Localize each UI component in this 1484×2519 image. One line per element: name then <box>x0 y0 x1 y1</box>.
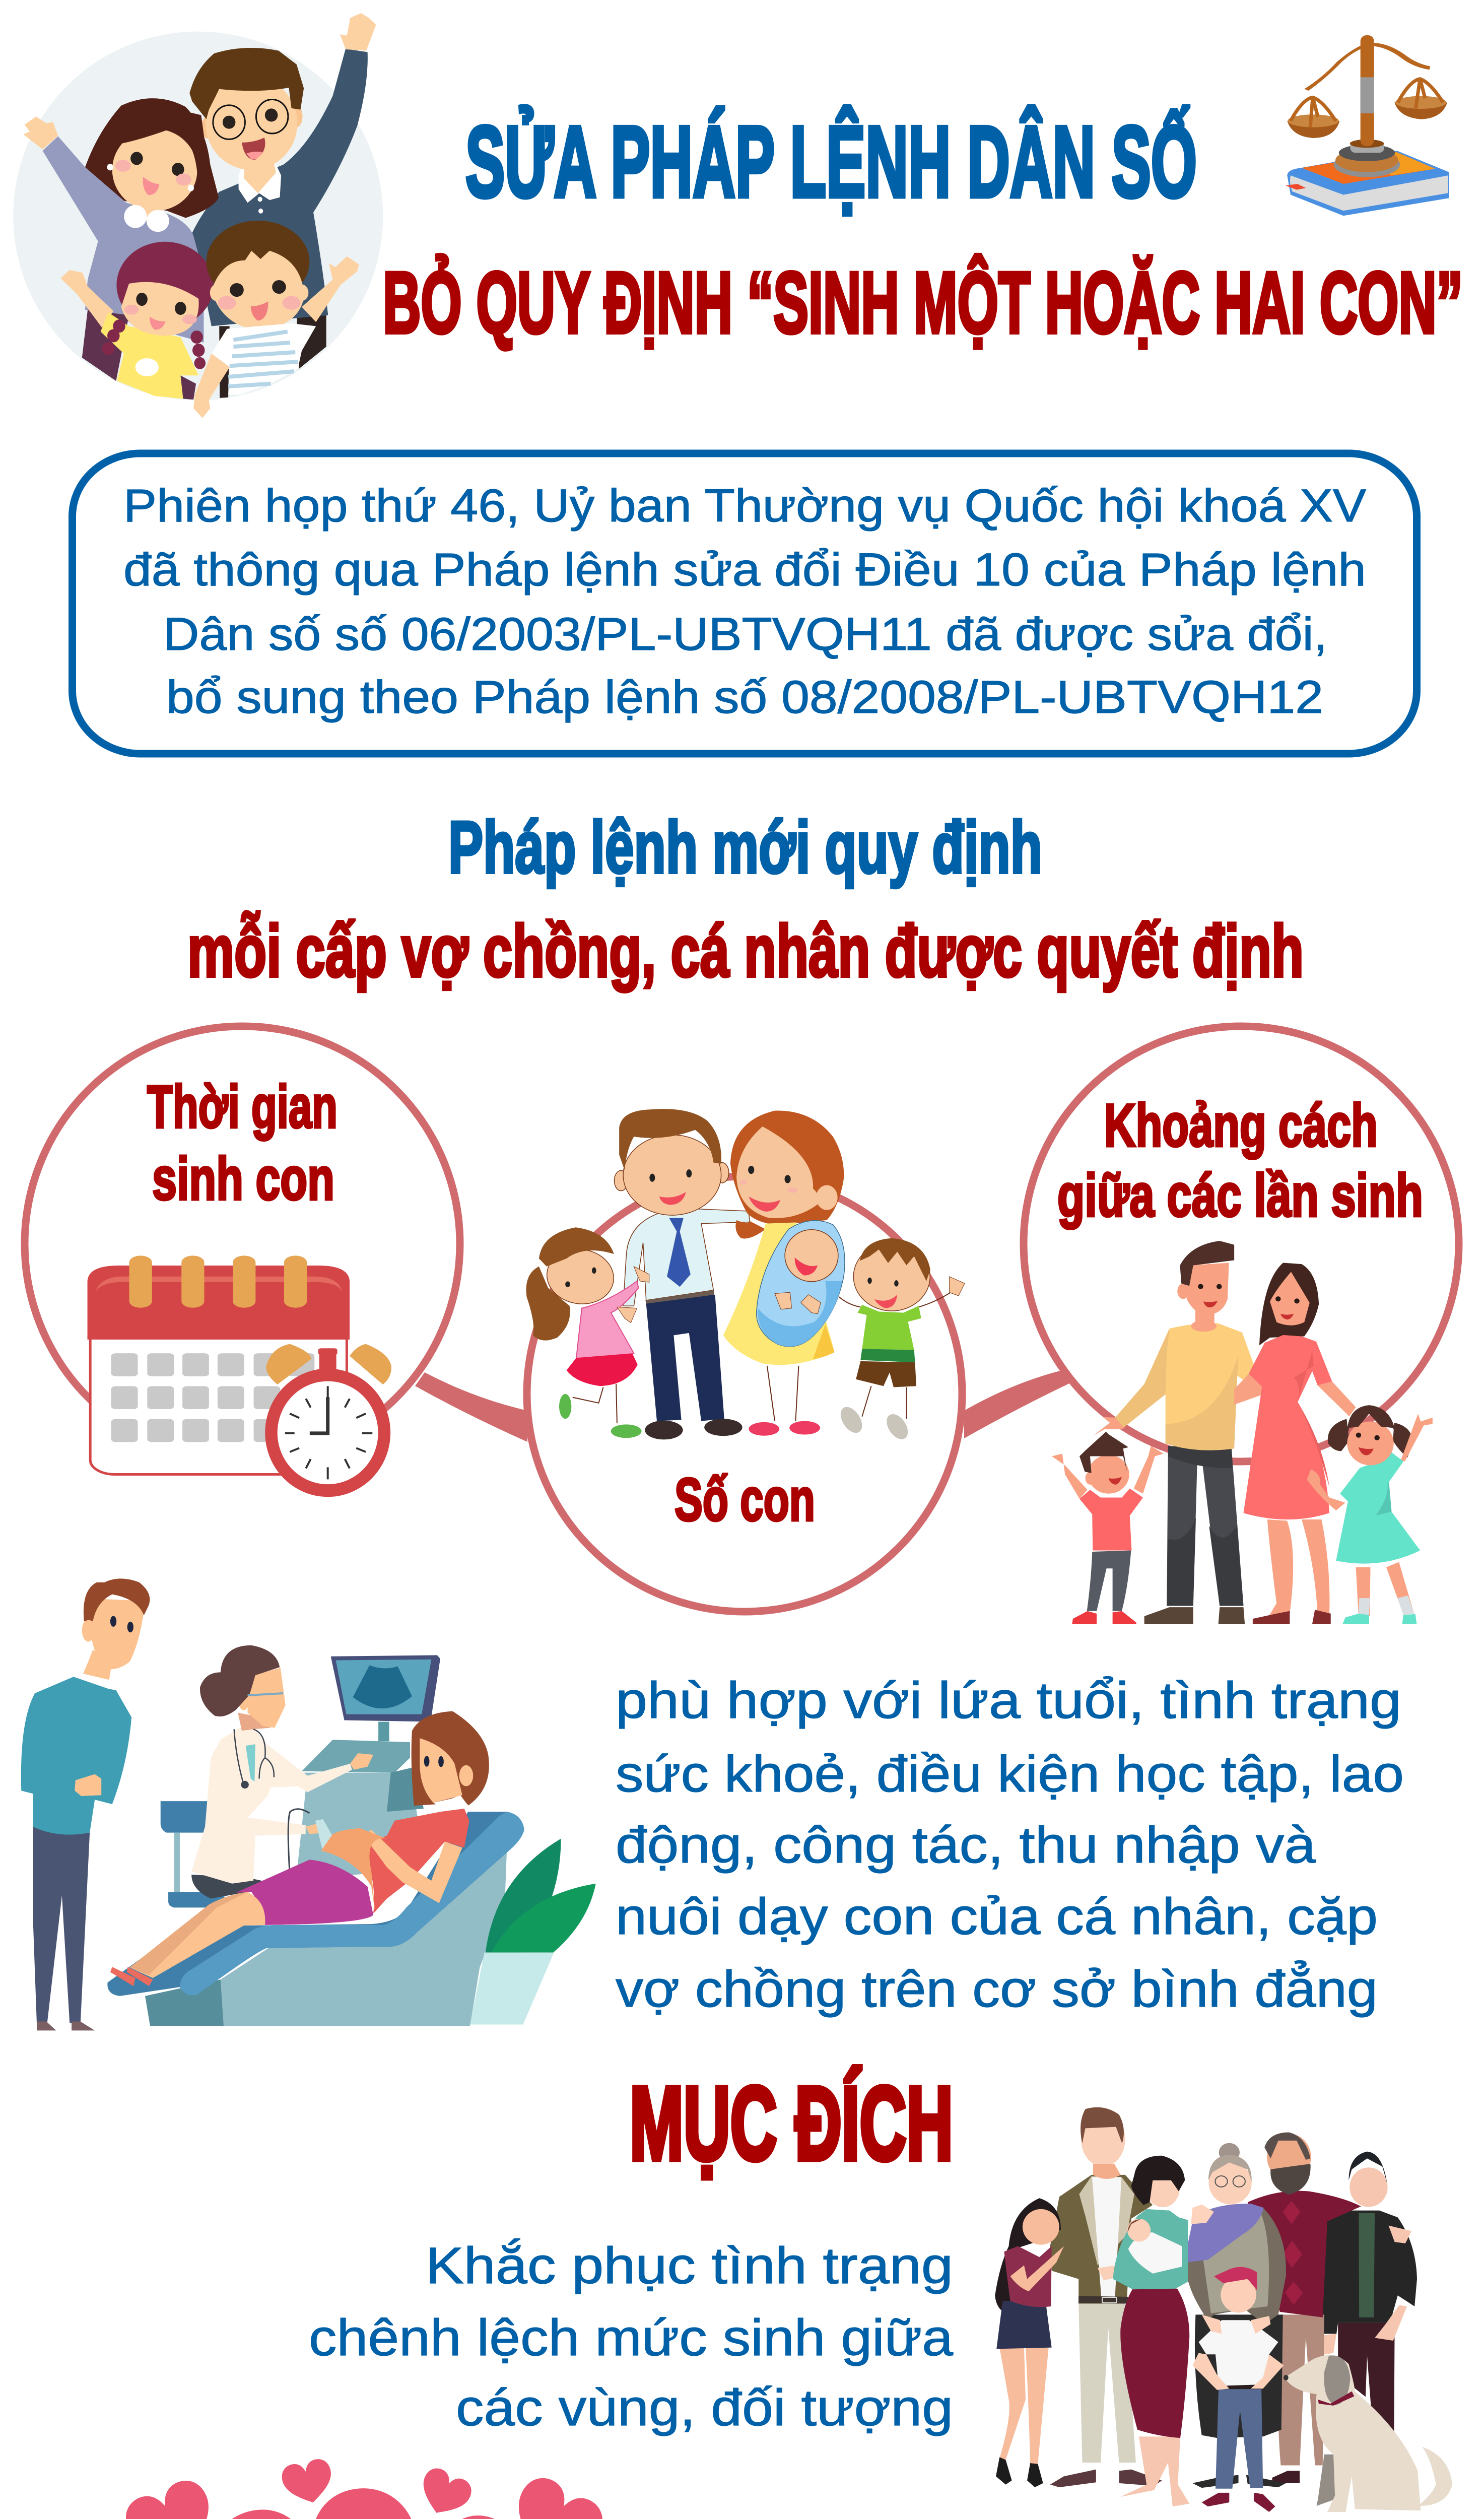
body text: purpose one <box>309 2237 953 2436</box>
illustration: family with newborn <box>526 1109 965 1441</box>
illustration: ultrasound scene <box>21 1578 596 2030</box>
girl left <box>995 2198 1064 2487</box>
body text: suitability: động, công tác, thu nhập và <box>616 1816 1316 1874</box>
title <box>383 106 1463 351</box>
illustration: heart tree with family <box>6 2457 681 2519</box>
heading: new ordinance <box>187 806 1304 992</box>
body text: purpose one: chênh lệch mức sinh giữa <box>309 2309 953 2366</box>
label: thoi gian sinh con <box>147 1073 338 1213</box>
label: so con: Số con <box>674 1466 815 1534</box>
boy <box>1052 1432 1164 1624</box>
heading: purpose: MỤC ĐÍCH <box>630 2065 953 2181</box>
label: khoang cach: Khoảng cách <box>1104 1092 1378 1159</box>
illustration: parents with two children <box>1052 1241 1433 1624</box>
mother <box>723 1111 844 1436</box>
baby <box>757 1221 845 1347</box>
body text: purpose one: Khắc phục tình trạng <box>426 2237 953 2294</box>
boy with cap <box>1192 2267 1284 2512</box>
plant <box>470 1839 596 2024</box>
young woman with baby <box>1113 2156 1189 2506</box>
connector right <box>964 1370 1071 1438</box>
machine <box>296 1655 440 1881</box>
doctor <box>191 1645 373 1899</box>
teen right <box>1310 2152 1417 2434</box>
illustration: extended family with dog <box>995 2107 1452 2512</box>
heading: new ordinance: Pháp lệnh mới quy định <box>448 806 1042 888</box>
husband <box>21 1578 150 2030</box>
connector left <box>415 1372 527 1442</box>
grandma <box>1184 2143 1286 2488</box>
body text: purpose one: các vùng, đối tượng <box>456 2379 953 2436</box>
girl <box>1328 1405 1433 1624</box>
intro text: Phiên họp thứ 46, Uỷ ban Thường vụ Quốc hội khoá XV <box>123 480 1366 532</box>
body text: suitability: vợ chồng trên cơ sở bình đẳng <box>616 1960 1378 2018</box>
patient <box>110 1711 489 1986</box>
panel: circle spacing between births <box>1024 1026 1459 1462</box>
mother <box>1234 1263 1356 1624</box>
intro text <box>123 480 1366 723</box>
panel: intro box <box>73 453 1416 754</box>
body text: suitability: phù hợp với lứa tuổi, tình trạng <box>616 1672 1401 1729</box>
boy <box>836 1238 965 1441</box>
body text: suitability <box>616 1672 1404 2018</box>
label: thoi gian sinh con: sinh con <box>152 1145 334 1213</box>
body text: suitability: sức khoẻ, điều kiện học tập, lao <box>616 1745 1404 1803</box>
grandpa <box>1248 2133 1361 2483</box>
young man <box>1050 2107 1162 2487</box>
father <box>614 1109 750 1439</box>
illustration: waving family in circle <box>13 13 383 418</box>
father <box>1093 1241 1264 1624</box>
icon: calendar and clock <box>88 1255 391 1497</box>
hearts canopy <box>66 2457 643 2519</box>
base and chair <box>107 1801 524 2026</box>
panel: circle time of birth <box>25 1026 460 1462</box>
girl <box>526 1227 649 1438</box>
dog <box>1284 2355 1452 2512</box>
intro text: Dân số số 06/2003/PL-UBTVQH11 đã được sửa đổi, <box>163 609 1327 660</box>
intro text: bổ sung theo Pháp lệnh số 08/2008/PL-UBTVQH12 <box>166 672 1323 723</box>
intro text: đã thông qua Pháp lệnh sửa đổi Điều 10 của Pháp lệnh <box>123 544 1366 595</box>
panel: circle number of children <box>527 1176 962 1612</box>
label: khoang cach <box>1057 1092 1423 1229</box>
icon: scales on book <box>1286 35 1449 216</box>
body text: suitability: nuôi dạy con của cá nhân, cặp <box>616 1888 1378 1945</box>
label: thoi gian sinh con: Thời gian <box>147 1073 338 1141</box>
